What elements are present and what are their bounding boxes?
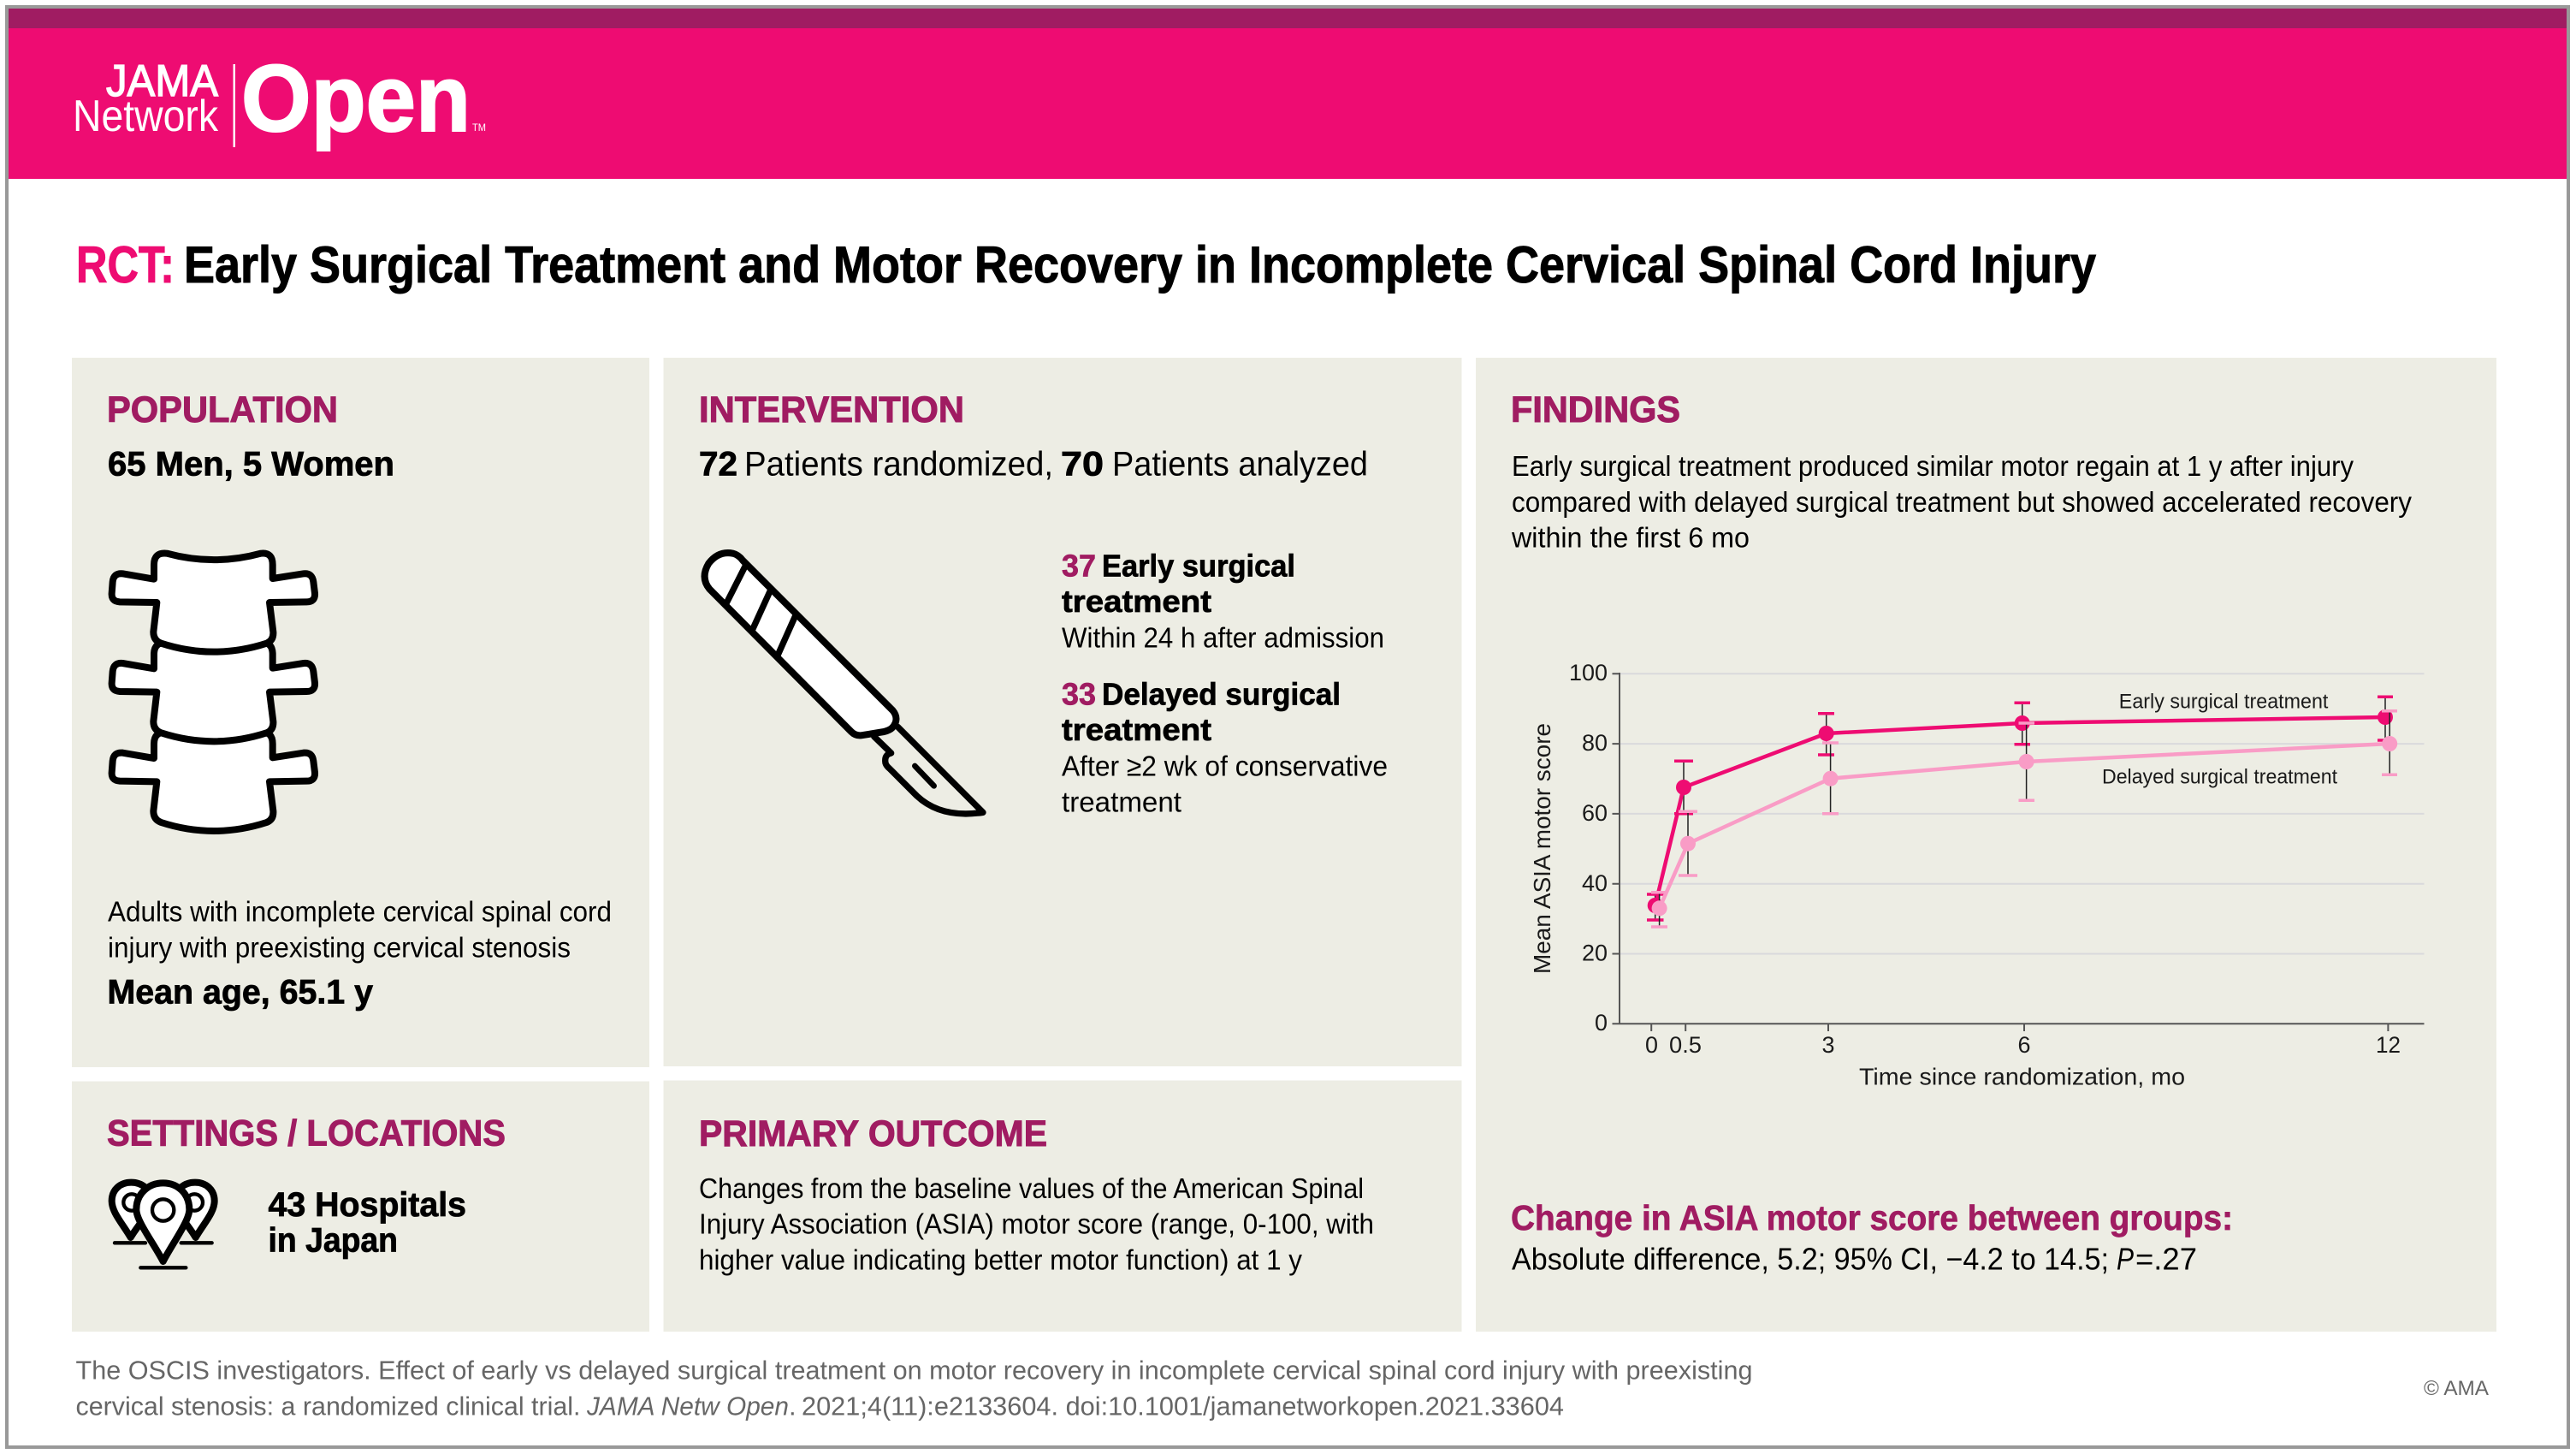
findings summary: compared with delayed surgical treatment but showed accelerated recovery [1512, 486, 2412, 518]
citation [75, 1356, 1752, 1421]
delayed surgical treatment arm: treatment [1062, 712, 1211, 747]
randomized and analyzed counts: 70 [1061, 446, 1104, 484]
delayed surgical treatment arm: After ≥2 wk of conservative [1062, 751, 1388, 782]
hospitals count: in Japan [269, 1221, 398, 1259]
logo: JAMA Network Open: Open [241, 46, 471, 151]
y axis title: Mean ASIA motor score [1529, 723, 1555, 974]
y axis labels: 60 [1582, 800, 1608, 826]
early surgical treatment arm: Within 24 h after admission [1062, 622, 1384, 654]
between-group change result: =.27 [2135, 1241, 2197, 1276]
logo: JAMA Network Open: TM [472, 122, 486, 134]
copyright: © AMA [2424, 1377, 2489, 1400]
heading: intervention: INTERVENTION [699, 389, 964, 430]
delayed surgical treatment arm: Delayed surgical [1102, 676, 1341, 711]
between-group change heading: Change in ASIA motor score between groups: [1511, 1198, 2233, 1237]
population description [108, 896, 612, 963]
panel: findings [1476, 358, 2496, 1332]
findings summary: within the first 6 mo [1511, 522, 1750, 553]
y axis labels: 0 [1595, 1010, 1608, 1036]
mean age: Mean age, 65.1 y [108, 974, 374, 1012]
x axis title: Time since randomization, mo [1859, 1063, 2185, 1089]
logo: JAMA Network Open: Network [73, 92, 219, 141]
findings summary: Early surgical treatment produced similar motor regain at 1 y after injury [1512, 450, 2354, 482]
between-group change result: P [2117, 1241, 2134, 1276]
between-group change result: Absolute difference, 5.2; 95% CI, −4.2 to 14.5; [1512, 1241, 2109, 1276]
series label: delayed: Delayed surgical treatment [2102, 765, 2337, 788]
early surgical treatment arm: Early surgical [1102, 548, 1295, 583]
series label: early: Early surgical treatment [2119, 691, 2329, 714]
panel: population [72, 358, 649, 1067]
heading: primary outcome: PRIMARY OUTCOME [699, 1113, 1047, 1154]
panel: intervention [664, 358, 1461, 1066]
delayed surgical treatment arm [1062, 676, 1388, 817]
citation: . [789, 1391, 796, 1421]
x axis labels: 0 [1645, 1032, 1658, 1058]
line chart: mean ASIA motor score [1529, 660, 2425, 1089]
heading: population: POPULATION [107, 389, 338, 430]
primary outcome description: Injury Association (ASIA) motor score (range, 0-100, with [699, 1208, 1374, 1240]
primary outcome description: higher value indicating better motor function) at 1 y [699, 1243, 1302, 1275]
heading: settings and locations: SETTINGS / LOCATIONS [107, 1113, 506, 1154]
hospitals count: 43 Hospitals [269, 1186, 466, 1224]
early surgical treatment arm: treatment [1062, 584, 1211, 619]
icon: scalpel [705, 553, 983, 814]
y axis labels: 20 [1582, 940, 1608, 965]
randomized and analyzed counts: 72 [699, 446, 737, 484]
randomized and analyzed counts [699, 446, 1368, 484]
citation: cervical stenosis: a randomized clinical trial. [75, 1391, 580, 1421]
population description: injury with preexisting cervical stenosis [108, 931, 571, 963]
series: delayed surgical treatment [1651, 711, 2397, 927]
findings summary [1511, 450, 2412, 553]
population description: Adults with incomplete cervical spinal cord [108, 896, 612, 928]
citation: 2021;4(11):e2133604. doi:10.1001/jamanetworkopen.2021.33604 [802, 1391, 1564, 1421]
y axis labels: 40 [1582, 870, 1608, 896]
early surgical treatment arm [1062, 548, 1384, 654]
icon: spine vertebrae [112, 553, 315, 831]
participants count: 65 Men, 5 Women [108, 446, 394, 484]
header banner [9, 9, 2567, 179]
citation: The OSCIS investigators. Effect of early vs delayed surgical treatment on motor recovery in incomplete cervical spinal cord injury with preexisting [75, 1356, 1752, 1386]
early surgical treatment arm: 37 [1062, 548, 1096, 583]
primary outcome description [699, 1172, 1374, 1275]
panel: primary outcome [664, 1080, 1461, 1332]
y axis labels: 80 [1582, 730, 1608, 756]
x axis labels: 3 [1822, 1032, 1834, 1058]
x axis labels [1645, 1032, 2401, 1058]
x axis labels: 6 [2017, 1032, 2031, 1058]
panel: settings and locations [72, 1082, 649, 1332]
randomized and analyzed counts: Patients analyzed [1112, 446, 1368, 484]
y axis labels: 100 [1569, 660, 1608, 685]
icon: map pins [112, 1183, 215, 1267]
series: early surgical treatment [1647, 697, 2393, 920]
heading: findings: FINDINGS [1511, 389, 1680, 430]
citation: JAMA Netw Open [586, 1391, 789, 1421]
delayed surgical treatment arm: 33 [1062, 676, 1096, 711]
delayed surgical treatment arm: treatment [1062, 786, 1181, 817]
randomized and analyzed counts: Patients randomized, [744, 446, 1053, 484]
title: Early Surgical Treatment and Motor Recovery in Incomplete Cervical Spinal Cord Injury [184, 236, 2097, 294]
logo: JAMA Network Open [73, 46, 486, 151]
x axis labels: 0.5 [1669, 1032, 1702, 1058]
title: RCT: [76, 236, 175, 294]
primary outcome description: Changes from the baseline values of the American Spinal [699, 1172, 1364, 1204]
y axis labels [1569, 660, 1608, 1036]
hospitals count [269, 1186, 466, 1259]
x axis labels: 12 [2376, 1032, 2401, 1058]
logo: JAMA Network Open: JAMA [106, 56, 218, 106]
